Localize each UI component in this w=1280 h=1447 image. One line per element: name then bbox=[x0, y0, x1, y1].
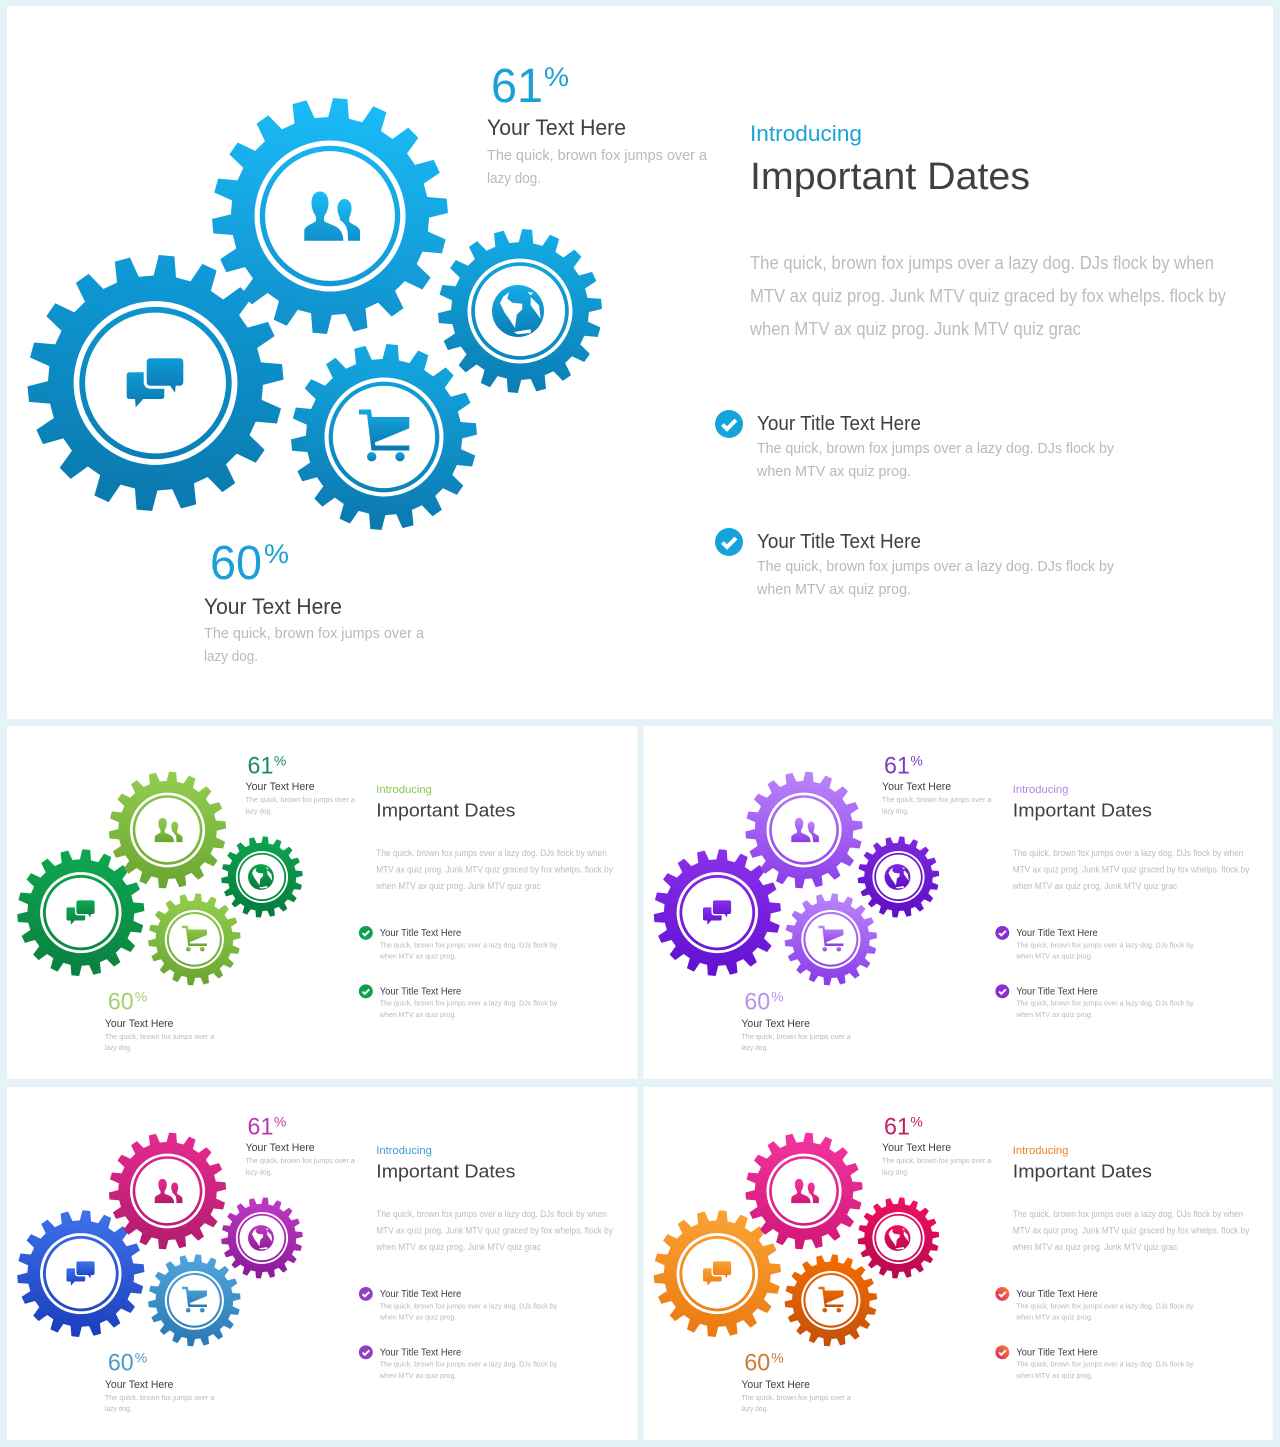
stat: 61 percent bbox=[882, 1114, 992, 1177]
stat: 61 percent bbox=[246, 753, 356, 816]
stat: 61 percent: 61 bbox=[248, 753, 273, 780]
icon: people bbox=[304, 192, 360, 241]
icon: people bbox=[155, 818, 182, 842]
heading: Important Dates bbox=[750, 156, 1030, 198]
stat: 61 percent: lazy dog. bbox=[246, 1168, 272, 1177]
heading: Important Dates bbox=[1013, 1161, 1152, 1182]
intro paragraph: MTV ax quiz prog. Junk MTV quiz graced by fox whelps. flock by bbox=[1013, 1226, 1250, 1236]
list item 1: Your Title Text Here bbox=[1016, 1289, 1098, 1300]
list item 1 bbox=[359, 926, 557, 961]
gear: cart bbox=[781, 890, 881, 989]
stat: 61 percent: % bbox=[544, 62, 569, 92]
stat: 60 percent: lazy dog. bbox=[105, 1404, 132, 1413]
list item 1: when MTV ax quiz prog. bbox=[379, 1313, 456, 1322]
stat: 61 percent: % bbox=[274, 1115, 286, 1130]
intro paragraph: MTV ax quiz prog. Junk MTV quiz graced by fox whelps. flock by bbox=[376, 865, 613, 875]
list item 1: The quick, brown fox jumps over a lazy dog. DJs flock by bbox=[380, 940, 557, 949]
gear: people bbox=[203, 88, 457, 344]
icon: shopping cart bbox=[818, 1287, 843, 1312]
heading bbox=[376, 1145, 515, 1182]
stat: 60 percent: Your Text Here bbox=[204, 594, 342, 619]
heading bbox=[1013, 784, 1152, 821]
stat: 61 percent: lazy dog. bbox=[882, 1168, 909, 1177]
stat: 60 percent: Your Text Here bbox=[741, 1018, 810, 1030]
list item 1: when MTV ax quiz prog. bbox=[1015, 1313, 1093, 1322]
icon: globe bbox=[248, 1225, 274, 1251]
intro paragraph: when MTV ax quiz prog. Junk MTV quiz grac bbox=[1012, 1242, 1178, 1252]
list item 1: when MTV ax quiz prog. bbox=[756, 463, 911, 480]
list item 1: when MTV ax quiz prog. bbox=[1015, 952, 1093, 961]
intro paragraph bbox=[749, 253, 1226, 339]
list item 2: when MTV ax quiz prog. bbox=[756, 581, 911, 598]
panel: purple slide bbox=[644, 726, 1273, 1079]
list item 1: Your Title Text Here bbox=[380, 1289, 462, 1300]
stat: 61 percent: Your Text Here bbox=[487, 115, 626, 140]
heading bbox=[1013, 1145, 1152, 1182]
stat: 61 percent: Your Text Here bbox=[246, 781, 315, 793]
panel: green slide bbox=[7, 726, 637, 1079]
stat: 61 percent: 61 bbox=[884, 1114, 910, 1141]
gear: globe bbox=[432, 222, 608, 400]
stat: 60 percent: The quick, brown fox jumps over a bbox=[105, 1032, 215, 1041]
intro paragraph: The quick, brown fox jumps over a lazy dog. DJs flock by when bbox=[1013, 848, 1243, 858]
gear: people bbox=[104, 1128, 231, 1254]
stat: 61 percent: % bbox=[910, 754, 923, 769]
icon: people bbox=[791, 1179, 819, 1203]
intro paragraph bbox=[1012, 848, 1250, 891]
heading: Introducing bbox=[376, 784, 432, 796]
list item 2: The quick, brown fox jumps over a lazy dog. DJs flock by bbox=[380, 999, 557, 1008]
heading: Introducing bbox=[750, 121, 862, 146]
stat: 61 percent: % bbox=[274, 754, 286, 769]
gear: people bbox=[104, 767, 231, 893]
icon: chat bubbles bbox=[703, 1261, 731, 1286]
list item 2: when MTV ax quiz prog. bbox=[1015, 1371, 1093, 1380]
gear: chat bbox=[649, 1205, 786, 1342]
heading: Important Dates bbox=[376, 800, 515, 821]
panel: blue main slide bbox=[7, 6, 1273, 719]
list item 1 bbox=[359, 1287, 557, 1322]
stat: 61 percent: Your Text Here bbox=[246, 1142, 315, 1154]
stat: 61 percent: lazy dog. bbox=[882, 807, 909, 816]
icon: shopping cart bbox=[182, 1287, 207, 1312]
stat: 60 percent bbox=[204, 537, 425, 665]
list item 1: The quick, brown fox jumps over a lazy dog. DJs flock by bbox=[1016, 1301, 1194, 1310]
gear: globe bbox=[218, 1194, 306, 1282]
gear: people bbox=[741, 767, 867, 893]
stat: 60 percent: 60 bbox=[210, 537, 262, 590]
stat: 60 percent bbox=[741, 1350, 852, 1413]
list item 2: The quick, brown fox jumps over a lazy dog. DJs flock by bbox=[380, 1360, 557, 1369]
intro paragraph: when MTV ax quiz prog. Junk MTV quiz grac bbox=[375, 881, 541, 891]
list item 2: Your Title Text Here bbox=[380, 1347, 462, 1358]
list item 2: when MTV ax quiz prog. bbox=[1015, 1010, 1093, 1019]
stat: 61 percent: lazy dog. bbox=[487, 170, 541, 187]
gear: cart bbox=[145, 890, 244, 989]
stat: 60 percent bbox=[105, 989, 215, 1052]
panel: orange and pink slide bbox=[644, 1087, 1273, 1440]
list item 2: Your Title Text Here bbox=[1016, 986, 1098, 997]
list item 2: when MTV ax quiz prog. bbox=[379, 1010, 456, 1019]
icon: globe bbox=[885, 1225, 910, 1251]
gear: cart bbox=[145, 1251, 244, 1350]
stat: 60 percent: % bbox=[135, 990, 147, 1005]
icon: globe bbox=[885, 864, 910, 890]
intro paragraph bbox=[375, 1209, 613, 1252]
list item 1: The quick, brown fox jumps over a lazy dog. DJs flock by bbox=[757, 440, 1114, 457]
list item 2 bbox=[359, 984, 557, 1019]
stat: 61 percent: 61 bbox=[884, 753, 910, 780]
list item 2: Your Title Text Here bbox=[380, 986, 462, 997]
panel: blue and magenta slide bbox=[7, 1087, 637, 1440]
stat: 60 percent: Your Text Here bbox=[741, 1379, 810, 1391]
intro paragraph: MTV ax quiz prog. Junk MTV quiz graced by fox whelps. flock by bbox=[376, 1226, 613, 1236]
icon: globe bbox=[248, 864, 274, 890]
stat: 61 percent bbox=[882, 753, 992, 816]
list item 2 bbox=[995, 1345, 1194, 1380]
intro paragraph: The quick, brown fox jumps over a lazy dog. DJs flock by when bbox=[1013, 1209, 1243, 1219]
heading: Important Dates bbox=[1013, 800, 1152, 821]
stat: 60 percent: 60 bbox=[744, 989, 770, 1016]
stat: 61 percent bbox=[487, 60, 708, 187]
icon: people bbox=[155, 1179, 182, 1203]
intro paragraph: when MTV ax quiz prog. Junk MTV quiz grac bbox=[1012, 881, 1178, 891]
list item 2: when MTV ax quiz prog. bbox=[379, 1371, 456, 1380]
list item 1: Your Title Text Here bbox=[380, 928, 462, 939]
stat: 61 percent bbox=[246, 1114, 356, 1177]
icon: chat bubbles bbox=[127, 358, 183, 407]
stat: 61 percent: Your Text Here bbox=[882, 781, 951, 793]
stat: 60 percent bbox=[741, 989, 852, 1052]
gear: chat bbox=[18, 245, 293, 521]
list item 1 bbox=[995, 926, 1194, 961]
gear: globe bbox=[855, 833, 942, 921]
heading: Important Dates bbox=[376, 1161, 515, 1182]
stat: 60 percent: The quick, brown fox jumps over a bbox=[204, 625, 425, 642]
list item 2: The quick, brown fox jumps over a lazy dog. DJs flock by bbox=[1016, 1360, 1194, 1369]
stat: 61 percent: The quick, brown fox jumps over a bbox=[487, 147, 708, 164]
stat: 60 percent: % bbox=[135, 1351, 147, 1366]
stat: 61 percent: The quick, brown fox jumps over a bbox=[246, 795, 356, 804]
stat: 60 percent: % bbox=[771, 1351, 784, 1366]
list item 1: Your Title Text Here bbox=[757, 413, 921, 435]
gear: chat bbox=[12, 844, 149, 981]
list item 2 bbox=[359, 1345, 557, 1380]
gear: globe bbox=[855, 1194, 942, 1282]
stat: 61 percent: % bbox=[910, 1115, 923, 1130]
list item 1: The quick, brown fox jumps over a lazy dog. DJs flock by bbox=[380, 1301, 557, 1310]
intro paragraph bbox=[1012, 1209, 1250, 1252]
icon: chat bubbles bbox=[703, 900, 731, 925]
stat: 60 percent: lazy dog. bbox=[105, 1043, 132, 1052]
gear: cart bbox=[781, 1251, 881, 1350]
icon: shopping cart bbox=[359, 410, 409, 461]
stat: 60 percent: 60 bbox=[108, 989, 134, 1016]
icon: chat bubbles bbox=[66, 1261, 95, 1286]
stat: 60 percent: 60 bbox=[108, 1350, 134, 1377]
stat: 60 percent: The quick, brown fox jumps over a bbox=[105, 1393, 215, 1402]
intro paragraph: MTV ax quiz prog. Junk MTV quiz graced by fox whelps. flock by bbox=[1013, 865, 1250, 875]
gear: chat bbox=[649, 844, 786, 981]
stat: 60 percent: % bbox=[771, 990, 784, 1005]
stat: 61 percent: 61 bbox=[491, 60, 543, 113]
gear: globe bbox=[218, 833, 306, 921]
icon: people bbox=[791, 818, 819, 842]
list item 1 bbox=[995, 1287, 1194, 1322]
stat: 61 percent: Your Text Here bbox=[882, 1142, 951, 1154]
stat: 61 percent: The quick, brown fox jumps over a bbox=[246, 1156, 356, 1165]
stat: 60 percent: Your Text Here bbox=[105, 1018, 173, 1030]
intro paragraph: when MTV ax quiz prog. Junk MTV quiz grac bbox=[375, 1242, 541, 1252]
list item 1 bbox=[715, 410, 1114, 480]
stat: 60 percent: lazy dog. bbox=[741, 1404, 768, 1413]
list item 2: The quick, brown fox jumps over a lazy dog. DJs flock by bbox=[757, 558, 1114, 575]
icon: globe bbox=[492, 285, 544, 337]
heading: Introducing bbox=[1013, 784, 1068, 796]
list item 2: The quick, brown fox jumps over a lazy dog. DJs flock by bbox=[1016, 999, 1194, 1008]
list item 2 bbox=[715, 528, 1114, 598]
stat: 60 percent: Your Text Here bbox=[105, 1379, 173, 1391]
list item 1: The quick, brown fox jumps over a lazy dog. DJs flock by bbox=[1016, 940, 1194, 949]
heading bbox=[750, 121, 1030, 198]
gear: people bbox=[741, 1128, 867, 1254]
heading: Introducing bbox=[376, 1145, 432, 1157]
stat: 61 percent: 61 bbox=[248, 1114, 273, 1141]
stat: 60 percent: The quick, brown fox jumps over a bbox=[741, 1032, 852, 1041]
list item 2 bbox=[995, 984, 1194, 1019]
stat: 60 percent: % bbox=[264, 539, 289, 569]
intro paragraph: MTV ax quiz prog. Junk MTV quiz graced by fox whelps. flock by bbox=[750, 286, 1226, 306]
stat: 61 percent: lazy dog. bbox=[246, 807, 272, 816]
stat: 60 percent: 60 bbox=[744, 1350, 770, 1377]
intro paragraph: when MTV ax quiz prog. Junk MTV quiz grac bbox=[749, 319, 1081, 339]
gear: chat bbox=[12, 1205, 149, 1342]
heading: Introducing bbox=[1013, 1145, 1068, 1157]
gear: cart bbox=[284, 336, 484, 538]
heading bbox=[376, 784, 515, 821]
list item 1: when MTV ax quiz prog. bbox=[379, 952, 456, 961]
intro paragraph: The quick, brown fox jumps over a lazy dog. DJs flock by when bbox=[376, 848, 607, 858]
stat: 60 percent: lazy dog. bbox=[204, 648, 258, 665]
intro paragraph bbox=[375, 848, 613, 891]
list item 1: Your Title Text Here bbox=[1016, 928, 1098, 939]
stat: 60 percent: The quick, brown fox jumps over a bbox=[741, 1393, 852, 1402]
list item 2: Your Title Text Here bbox=[1016, 1347, 1098, 1358]
icon: shopping cart bbox=[818, 926, 843, 951]
icon: chat bubbles bbox=[66, 900, 95, 925]
stat: 61 percent: The quick, brown fox jumps over a bbox=[882, 795, 992, 804]
intro paragraph: The quick, brown fox jumps over a lazy dog. DJs flock by when bbox=[376, 1209, 607, 1219]
intro paragraph: The quick, brown fox jumps over a lazy dog. DJs flock by when bbox=[750, 253, 1214, 273]
stat: 61 percent: The quick, brown fox jumps over a bbox=[882, 1156, 992, 1165]
icon: shopping cart bbox=[182, 926, 207, 951]
stat: 60 percent bbox=[105, 1350, 215, 1413]
stat: 60 percent: lazy dog. bbox=[741, 1043, 768, 1052]
list item 2: Your Title Text Here bbox=[757, 531, 921, 553]
